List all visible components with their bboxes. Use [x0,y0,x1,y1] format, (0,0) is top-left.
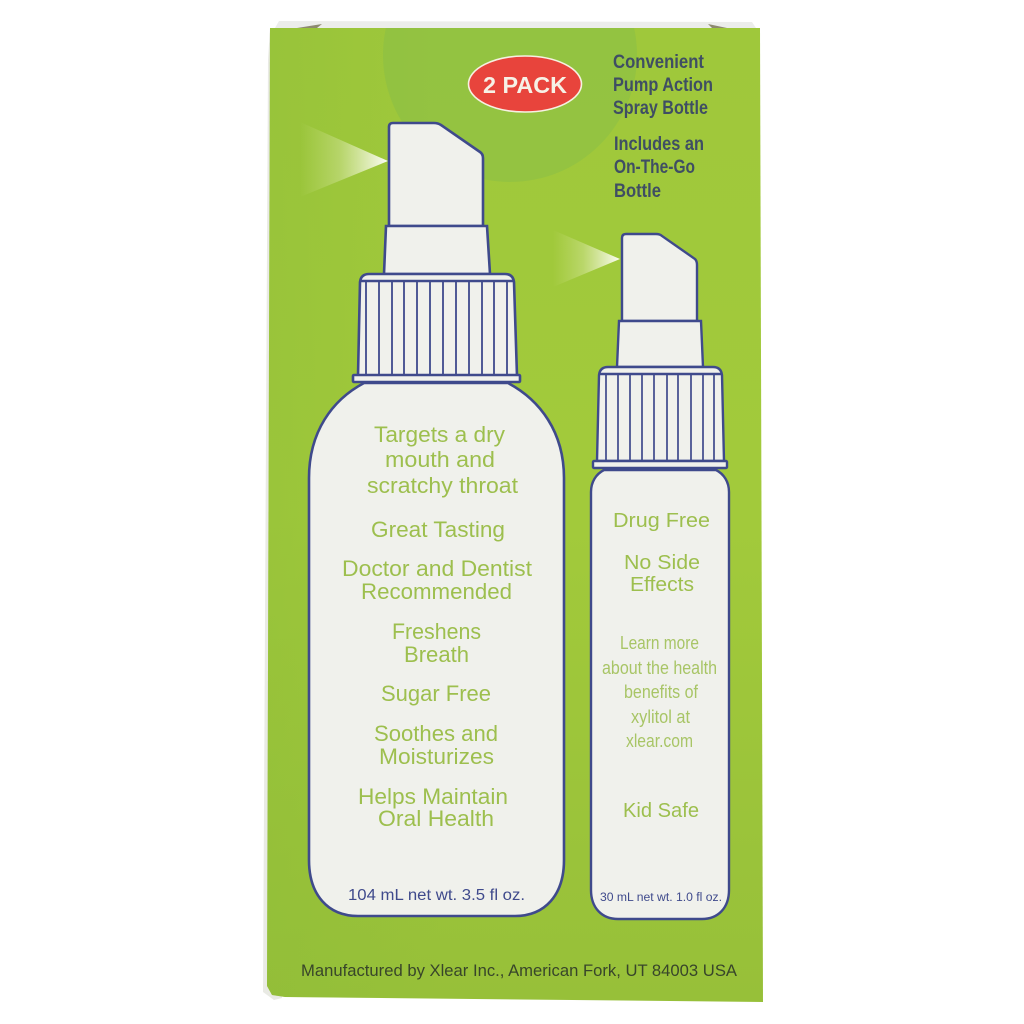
large bottle label text: Recommended [361,579,512,604]
large bottle label text: Doctor and Dentist [342,556,532,581]
box left side edge [263,28,282,1000]
small bottle learn more text: xylitol at [631,706,690,727]
small bottle learn more text: Learn more [620,632,699,653]
large bottle label text: mouth and [385,447,495,472]
text: pump action features [613,52,713,119]
large bottle label text: Oral Health [378,806,494,831]
spray mist: small bottle [553,230,620,287]
text: on-the-go feature: On-The-Go [614,157,695,178]
badge: 2 pack [468,56,582,112]
large bottle label text: Soothes and [374,721,498,746]
large bottle collar [384,226,490,274]
large bottle label text: Freshens [392,619,481,644]
small bottle learn more text: xlear.com [626,730,693,751]
large bottle label text: Targets a dry [374,422,505,447]
small bottle learn more text [602,632,717,751]
small bottle label text: No Side [624,551,700,574]
large bottle nozzle [389,123,483,226]
small bottle nozzle [622,234,697,321]
text: on-the-go feature: Includes an [614,134,704,155]
large bottle label text: Helps Maintain [358,784,508,809]
box top flap [275,21,756,28]
text: pump action features: Convenient [613,52,705,73]
small bottle learn more text: about the health [602,657,717,678]
small bottle label text [613,509,710,822]
large bottle cap [353,274,520,382]
small bottle label text: Effects [630,573,694,596]
large bottle label text: Moisturizes [379,744,494,769]
large bottle body [309,383,564,916]
small bottle label text: Kid Safe [623,799,699,822]
large bottle label text [342,422,532,831]
text: on-the-go feature [614,134,704,202]
manufacturer line: Manufactured by Xlear Inc., American Fork, UT 84003 USA [301,962,737,980]
large bottle label text: Breath [404,642,469,667]
large bottle net weight: 104 mL net wt. 3.5 fl oz. [348,887,525,904]
darker green circle [383,28,637,182]
small bottle net weight: 30 mL net wt. 1.0 fl oz. [600,892,722,904]
spray mist: large bottle [300,122,388,197]
large bottle label text: scratchy throat [367,473,518,498]
badge: 2 pack: 2 PACK [483,72,567,98]
small bottle [591,234,729,919]
small bottle learn more text: benefits of [624,681,699,702]
small bottle cap [593,367,727,468]
small bottle collar [617,321,703,367]
green box panel [267,28,763,1002]
large bottle [309,123,564,916]
small bottle label text: Drug Free [613,509,710,532]
small bottle body [591,470,729,919]
large bottle label text: Great Tasting [371,517,505,542]
text: pump action features: Pump Action [613,75,713,96]
text: pump action features: Spray Bottle [613,98,708,119]
large bottle label text: Sugar Free [381,681,491,706]
text: on-the-go feature: Bottle [614,181,661,202]
